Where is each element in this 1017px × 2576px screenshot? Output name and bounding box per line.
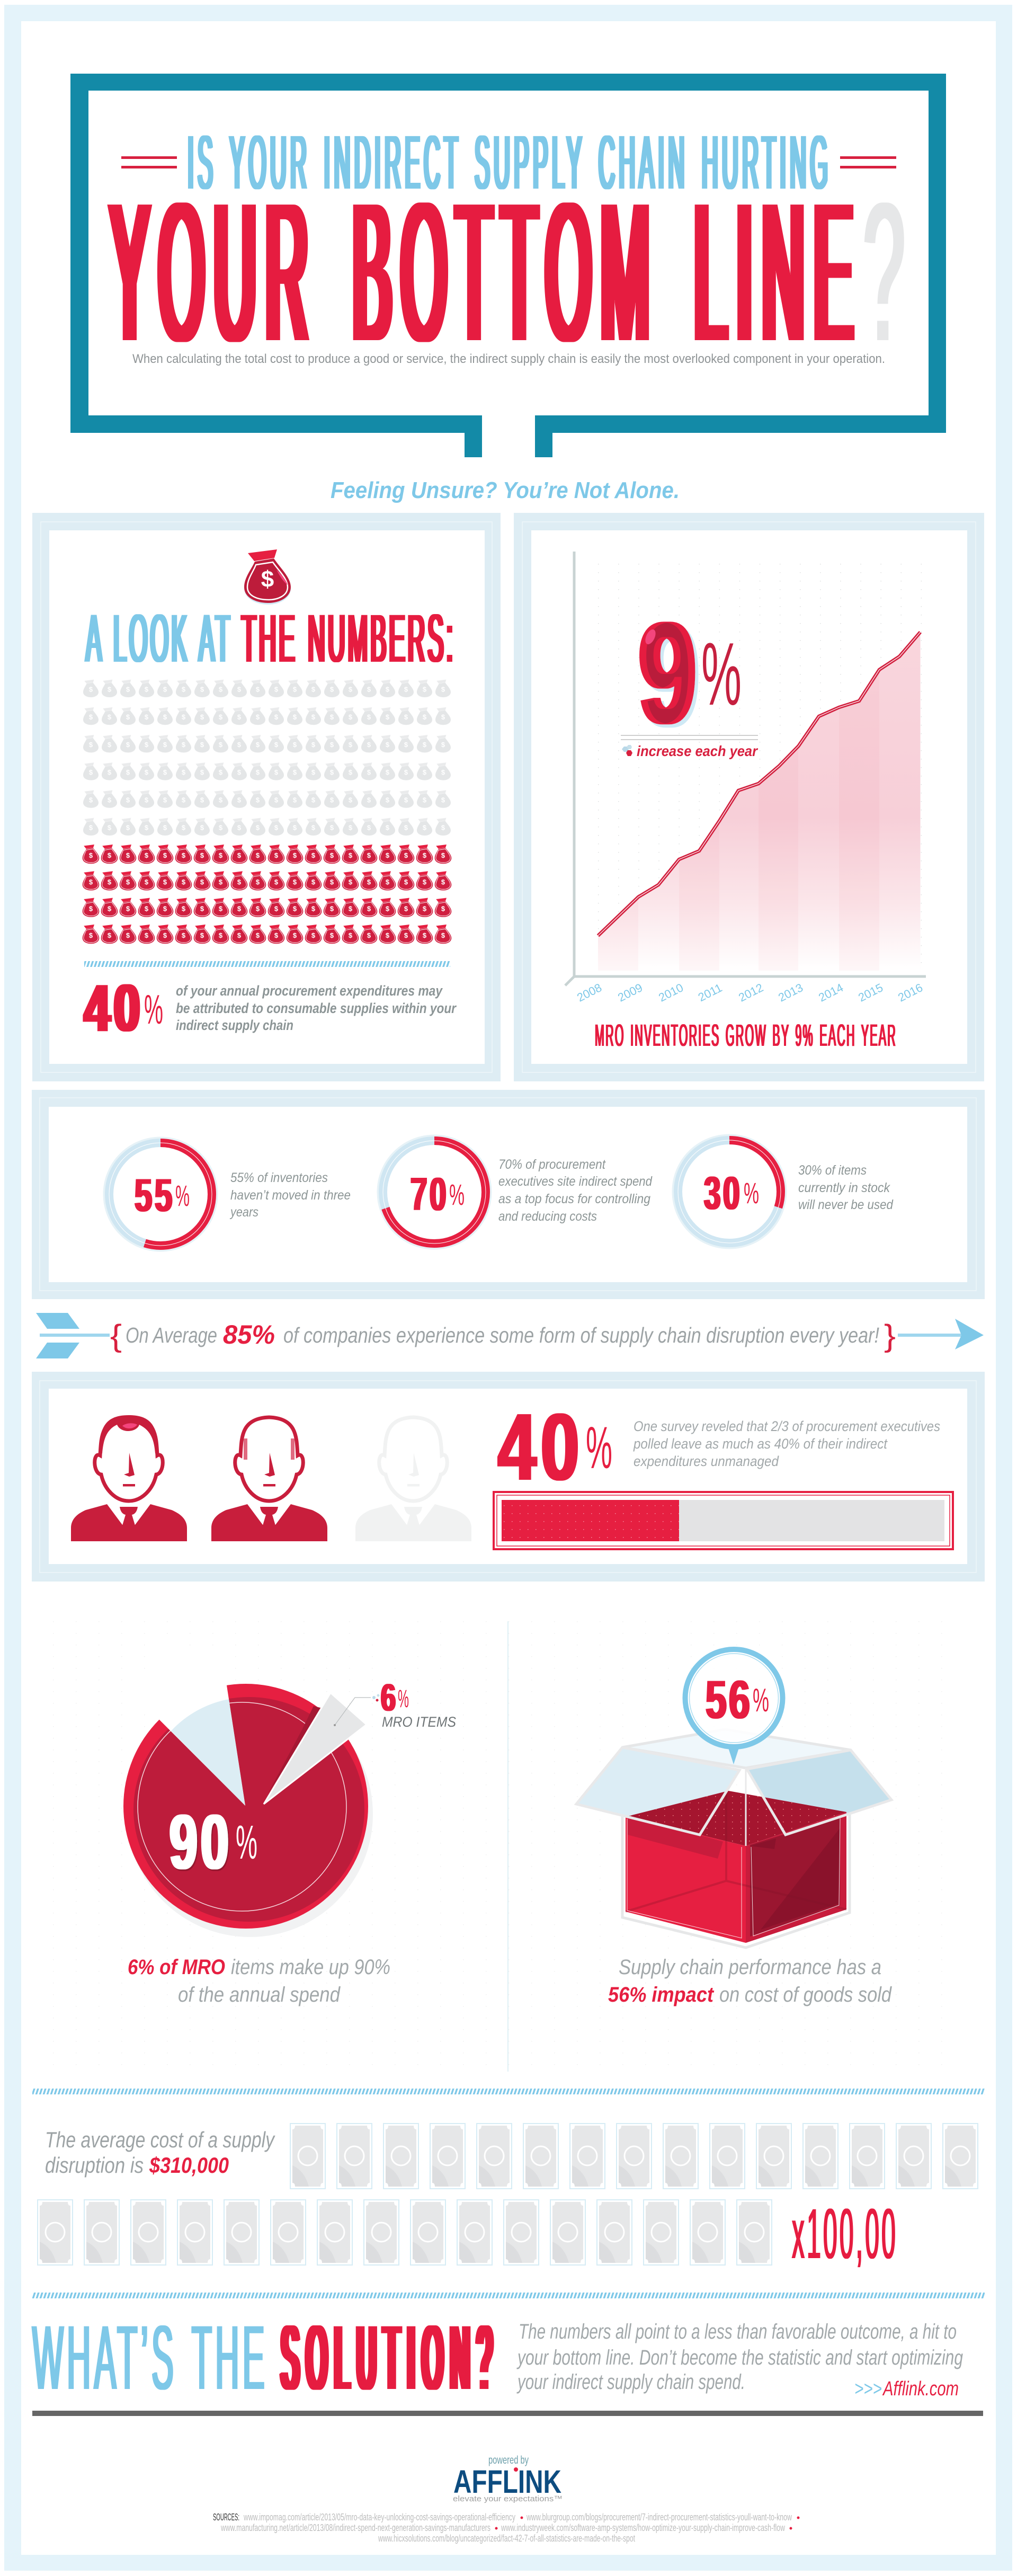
sources	[213, 2512, 800, 2544]
ring: 70 percent	[378, 1136, 490, 1248]
logo: afflink: powered by	[488, 2454, 529, 2466]
callout text	[110, 1319, 896, 1353]
pie label: 6 percent	[334, 1677, 456, 1730]
stat: 40 percent: %	[144, 986, 163, 1033]
axis year labels: 2011	[696, 981, 724, 1004]
caption: supply chain impact: on cost of goods sold	[719, 1983, 893, 2006]
text: 55 percent: 55% of inventories	[230, 1170, 328, 1185]
callout text: 85%	[223, 1320, 275, 1349]
text: procurement expenditures: be attributed to consumable supplies within your	[176, 1000, 457, 1016]
sources: www.blurgroup.com/blogs/procurement/7-indirect-procurement-statistics-youll-want-to-know	[526, 2512, 792, 2522]
stat: 9 percent: increase each year	[637, 743, 759, 759]
text: disruption cost: The average cost of a supply	[45, 2127, 275, 2152]
icon grid: red money bags	[82, 841, 452, 948]
box flap fills	[576, 1747, 891, 1835]
map pin: 56 percent: %	[753, 1682, 769, 1719]
map pin: 56 percent	[685, 1649, 783, 1764]
text: 30 percent: currently in stock	[798, 1180, 890, 1195]
text: survey: expenditures unmanaged	[634, 1453, 779, 1469]
logo: afflink	[453, 2454, 563, 2503]
dotted background	[53, 1621, 953, 2072]
pie label: 90 percent: 90	[170, 1799, 232, 1886]
pie label: 6 percent: MRO ITEMS	[382, 1714, 456, 1730]
text: SOLUTION?	[281, 2307, 499, 2409]
text: survey: One survey reveled that 2/3 of procurement executives	[634, 1418, 940, 1434]
callout text: On Average	[126, 1323, 217, 1347]
caption: supply chain impact	[608, 1956, 893, 2006]
text: survey	[633, 1418, 940, 1469]
text: 55 percent	[229, 1170, 351, 1220]
pie label: 6 percent: %	[398, 1684, 409, 1712]
text: ?	[863, 162, 905, 382]
panel: a look at the numbers: A LOOK AT	[86, 601, 233, 677]
text: solution	[516, 2320, 963, 2394]
ring: 30 percent	[673, 1135, 786, 1248]
axis year labels: 2009	[615, 981, 645, 1005]
axis year labels: 2014	[816, 981, 845, 1005]
text: 55 percent: years	[229, 1205, 258, 1220]
sources: www.industryweek.com/software-amp-systems/how-optimize-your-supply-chain-improve-cash-flow	[501, 2522, 786, 2533]
ring: 70 percent: %	[449, 1178, 465, 1211]
box back lid	[622, 1729, 851, 1768]
ring: 55 percent: 55	[135, 1169, 175, 1221]
box frame	[622, 1747, 850, 1948]
text: solution: your indirect supply chain spend.	[516, 2370, 745, 2394]
ring: 70 percent: 70	[411, 1168, 449, 1220]
stat: 40 percent unmanaged: %	[586, 1415, 612, 1481]
text: procurement expenditures	[176, 983, 457, 1033]
text: 30 percent: will never be used	[798, 1197, 894, 1212]
icon: executive with hair	[71, 1415, 187, 1541]
text: disruption cost: $310,000	[149, 2153, 229, 2178]
title block	[110, 120, 905, 382]
stat: 9 percent: %	[701, 624, 742, 724]
axis year labels: 2012	[736, 981, 765, 1005]
sources: www.hicxsolutions.com/blog/uncategorized/fact-42-7-of-all-statistics-are-made-on-the-spot	[378, 2533, 635, 2544]
logo: afflink: elevate your expectations™	[453, 2494, 563, 2503]
caption: mro spend: 6% of MRO	[128, 1956, 225, 1979]
title subtitle: When calculating the total cost to produce a good or service, the indirect supply chain is easily the most overlooked component in your operation.	[132, 352, 885, 366]
open box	[576, 1649, 891, 1948]
link: afflink	[854, 2378, 959, 2400]
axis year labels	[575, 981, 925, 1005]
link: afflink: Afflink.com	[882, 2378, 959, 2400]
callout text: {	[110, 1319, 122, 1353]
callout text: }	[884, 1319, 896, 1353]
ring: 55 percent	[104, 1138, 217, 1250]
text: disruption cost: disruption is	[45, 2153, 144, 2178]
ring: 55 percent: %	[175, 1179, 190, 1212]
heading: feeling unsure: Feeling Unsure? You’re Not Alone.	[331, 477, 680, 503]
caption: mro spend: items make up 90%	[231, 1956, 390, 1979]
text: disruption cost	[45, 2127, 275, 2178]
caption: supply chain impact: Supply chain performance has a	[619, 1956, 881, 1979]
caption: supply chain impact: 56% impact	[608, 1983, 715, 2006]
pie chart	[123, 1642, 373, 1937]
icon: balding executive	[211, 1417, 327, 1541]
text: 30 percent	[798, 1163, 894, 1212]
liquid faces	[626, 1791, 846, 1943]
ring: 30 percent: %	[744, 1176, 759, 1210]
stat: 9 percent: 9	[639, 592, 695, 753]
text: 30 percent: 30% of items	[798, 1163, 867, 1178]
text: procurement expenditures: of your annual procurement expenditures may	[176, 983, 443, 999]
text: THE NUMBERS:	[242, 601, 456, 677]
logo: afflink: AFFLINK	[453, 2464, 561, 2500]
stat: 9 percent	[621, 592, 759, 759]
icon: money bag	[244, 549, 291, 605]
text: 70 percent: and reducing costs	[498, 1209, 597, 1224]
link: afflink: >>>	[854, 2378, 882, 2400]
text: 70 percent: executives site indirect spend	[498, 1174, 653, 1189]
arrow callout: 85 percent	[36, 1313, 984, 1358]
sources: SOURCES:	[213, 2512, 239, 2522]
text: 70 percent	[498, 1157, 653, 1224]
caption: mro spend	[128, 1956, 390, 2006]
box flap outlines	[576, 1747, 891, 1846]
axis year labels: 2016	[896, 981, 925, 1005]
axis year labels: 2010	[656, 981, 685, 1005]
pie label: 6 percent: 6	[381, 1677, 396, 1719]
heading: what's the solution: WHAT’S THE	[32, 2307, 268, 2409]
arrow tail	[36, 1313, 110, 1358]
text: 70 percent: as a top focus for controlling	[498, 1192, 650, 1206]
panel: procurement executives	[32, 1372, 985, 1582]
ring: 30 percent: 30	[704, 1167, 742, 1219]
icon row: banknotes one	[290, 2123, 978, 2189]
panel: a look at the numbers	[32, 513, 501, 1081]
stat: 40 percent: 40	[84, 971, 144, 1045]
map pin: 56 percent: 56	[706, 1669, 752, 1730]
icon grid: grey money bags	[82, 675, 452, 841]
icon row: banknotes two	[37, 2199, 772, 2266]
axis year labels: 2013	[776, 981, 805, 1005]
sources: www.impomag.com/article/2013/05/mro-data-key-unlocking-cost-savings-operational-efficiency	[243, 2512, 515, 2522]
stat: 40 percent unmanaged: 40	[498, 1394, 584, 1500]
line chart	[565, 552, 926, 1005]
text: 55 percent: haven’t moved in three	[230, 1188, 351, 1203]
text: survey: polled leave as much as 40% of their indirect	[633, 1436, 888, 1452]
sources: www.manufacturing.net/article/2013/08/indirect-spend-next-generation-savings-manufacturers	[220, 2522, 490, 2533]
text: procurement expenditures: indirect supply chain	[176, 1017, 293, 1033]
caption: mro spend: of the annual spend	[178, 1983, 341, 2006]
text: 70 percent: 70% of procurement	[498, 1157, 606, 1172]
axis year labels: 2008	[575, 981, 604, 1005]
axis year labels: 2015	[856, 981, 885, 1005]
progress bar	[494, 1492, 953, 1549]
icon: grey executive	[355, 1417, 471, 1541]
title frame	[70, 74, 946, 457]
pie label: 90 percent: %	[236, 1816, 257, 1869]
icon: money bag: $	[261, 566, 274, 592]
panel: inventory growth chart	[514, 513, 984, 1081]
callout text: of companies experience some form of supply chain disruption every year!	[283, 1323, 879, 1347]
panel: percentage rings	[32, 1090, 985, 1299]
icon: hexagons	[622, 745, 632, 756]
arrow head	[898, 1319, 984, 1349]
